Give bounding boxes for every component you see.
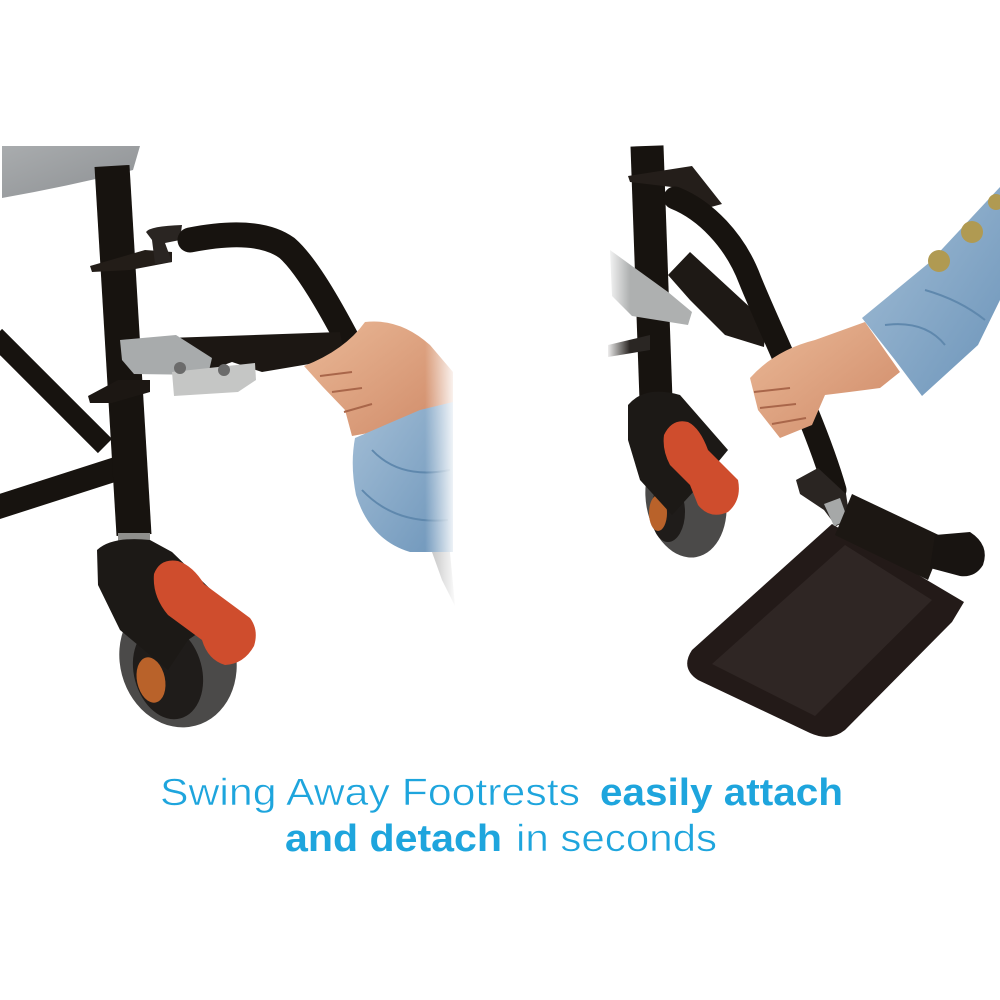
footplate textured surface — [712, 545, 932, 716]
upper hinge pin — [146, 225, 182, 264]
caster housing — [97, 539, 232, 670]
denim sleeve — [353, 402, 453, 552]
sleeve folds — [362, 450, 450, 521]
seat cushion — [2, 146, 140, 198]
caption line 2: and detach — [285, 818, 502, 860]
seat frame stub — [608, 335, 650, 357]
caption — [160, 772, 843, 860]
finger creases — [754, 388, 806, 424]
footrest arm tube — [675, 198, 835, 490]
hand gripping arm — [750, 322, 900, 438]
grey leg at photo edge — [432, 552, 455, 606]
footplate roller handle — [835, 494, 985, 580]
metal collar — [645, 394, 673, 408]
caption line 2: in seconds — [516, 818, 717, 860]
red brake pedal — [154, 561, 256, 665]
caption line 1: Swing Away Footrests — [160, 772, 580, 814]
metal collar — [118, 533, 150, 549]
left edge fade — [606, 230, 630, 360]
right photo: footrest swung away — [606, 146, 1000, 737]
caster wheel — [104, 579, 252, 741]
arm plate — [668, 252, 766, 347]
metal hinge pin — [824, 498, 848, 526]
photo right edge fade — [425, 300, 457, 620]
footrest arm tube — [190, 235, 359, 362]
lower bracket — [88, 380, 150, 403]
hand gripping arm — [304, 321, 453, 436]
left photo: footrest being attached — [0, 146, 457, 741]
upper bracket — [628, 166, 722, 210]
footrest arm plate — [168, 332, 345, 372]
forearm denim sleeve — [862, 187, 1000, 396]
frame tubes — [0, 166, 134, 535]
red brake pedal — [664, 421, 739, 515]
caption line 1: easily attach — [600, 772, 843, 814]
sleeve buttons — [928, 194, 1000, 272]
caster wheel — [637, 436, 735, 564]
footrest hinge — [796, 468, 850, 526]
upper pivot bracket — [90, 250, 172, 272]
frame tube — [647, 146, 656, 400]
sleeve folds — [885, 290, 985, 345]
finger creases — [320, 372, 372, 412]
metal latch — [610, 250, 692, 325]
footplate — [687, 524, 964, 737]
metal latch — [120, 335, 256, 396]
caster housing — [628, 392, 728, 515]
